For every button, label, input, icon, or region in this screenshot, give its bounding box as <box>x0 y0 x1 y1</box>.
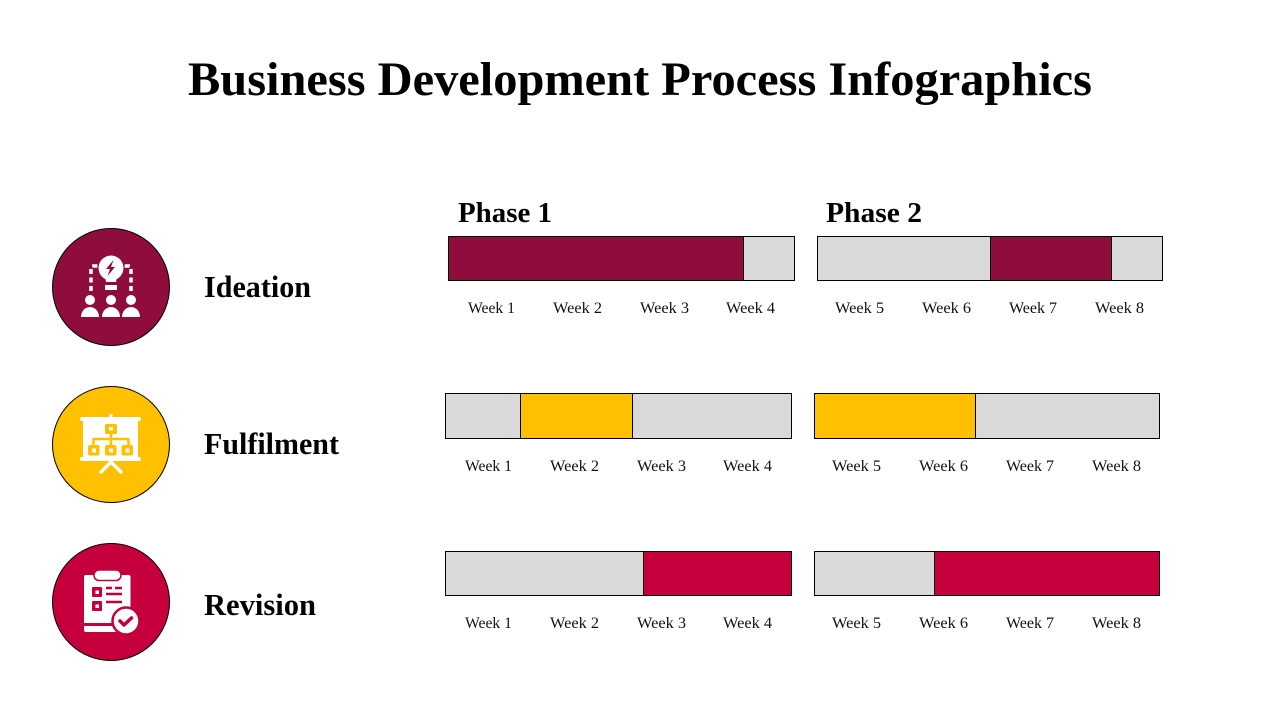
week labels: Ideation: Week 7 <box>1009 300 1057 317</box>
week labels: Fulfilment: Week 7 <box>1006 458 1054 475</box>
week labels: Revision: Week 7 <box>1006 615 1054 632</box>
week labels: Ideation: Week 1 <box>468 300 515 317</box>
week labels: Fulfilment <box>465 458 1141 475</box>
week labels: Fulfilment: Week 6 <box>919 458 968 475</box>
icon: clipboard checklist <box>52 544 170 660</box>
week labels: Revision: Week 6 <box>919 615 968 632</box>
heading: Phase 1: Phase 1 <box>458 197 552 229</box>
week labels: Revision: Week 5 <box>832 615 881 632</box>
week labels: Revision: Week 4 <box>723 615 772 632</box>
Gantt bar: Revision phase 1 <box>446 552 792 596</box>
row: Revision <box>52 544 1160 660</box>
week labels: Revision: Week 2 <box>550 615 599 632</box>
week labels: Revision: Week 8 <box>1092 615 1141 632</box>
week labels: Ideation: Week 6 <box>922 300 971 317</box>
week labels: Fulfilment: Week 1 <box>465 458 512 475</box>
week labels: Ideation <box>468 300 1144 317</box>
week labels: Fulfilment: Week 5 <box>832 458 881 475</box>
week labels: Revision <box>465 615 1141 632</box>
icon: presentation board with org chart <box>52 386 170 502</box>
week labels: Ideation: Week 5 <box>835 300 884 317</box>
label: Fulfilment: Fulfilment <box>204 426 340 461</box>
week labels: Revision: Week 1 <box>465 615 512 632</box>
Gantt bar: Fulfilment phase 1 <box>446 394 792 438</box>
week labels: Fulfilment: Week 3 <box>637 458 686 475</box>
label: Revision: Revision <box>204 587 316 622</box>
Gantt bar: Ideation phase 2 <box>818 236 1162 280</box>
week labels: Ideation: Week 2 <box>553 300 602 317</box>
week labels: Fulfilment: Week 8 <box>1092 458 1141 475</box>
Gantt bar: Fulfilment phase 2 <box>814 394 1160 438</box>
row: Ideation <box>52 228 1162 346</box>
row: Fulfilment <box>52 386 1160 502</box>
week labels: Revision: Week 3 <box>637 615 686 632</box>
week labels: Fulfilment: Week 4 <box>723 458 772 475</box>
week labels: Ideation: Week 4 <box>726 300 775 317</box>
Gantt bar: Revision phase 2 <box>814 552 1160 596</box>
heading: Phase 2: Phase 2 <box>826 197 922 229</box>
week labels: Ideation: Week 8 <box>1095 300 1144 317</box>
week labels: Fulfilment: Week 2 <box>550 458 599 475</box>
label: Ideation: Ideation <box>204 269 311 304</box>
title: Business Development Process Infographics <box>188 53 1092 106</box>
Gantt bar: Ideation phase 1 <box>448 236 794 280</box>
icon: ideation team with light bulb <box>52 228 170 346</box>
week labels: Ideation: Week 3 <box>640 300 689 317</box>
